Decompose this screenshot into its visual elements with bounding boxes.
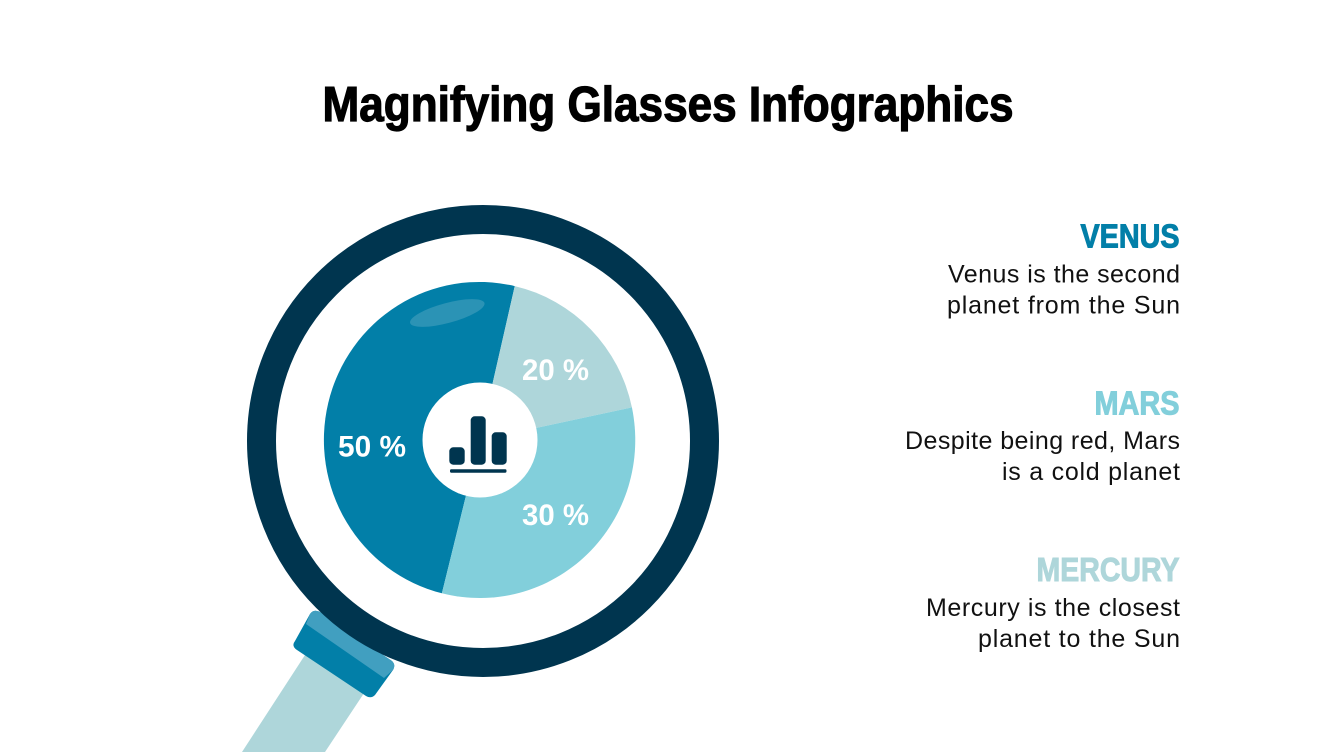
- description: Venus: Venus is the second: [948, 260, 1180, 288]
- description: Mars: Despite being red, Mars: [905, 427, 1180, 455]
- description: Mercury: Mercury is the closest: [926, 594, 1180, 622]
- text block: Venus: [947, 218, 1180, 320]
- label: 20 percent: 20 %: [522, 354, 589, 387]
- lens ring: [262, 220, 704, 662]
- slice: 20 percent: [480, 286, 632, 440]
- heading: Venus: VENUS: [1080, 218, 1180, 254]
- heading: Mercury: MERCURY: [1036, 551, 1180, 588]
- handle: [242, 635, 378, 752]
- magnifying glass: [242, 220, 704, 752]
- text block: Mercury: [926, 551, 1180, 653]
- label: 50 percent: 50 %: [338, 430, 406, 464]
- description: Venus: [947, 260, 1180, 320]
- icon: bar chart: [449, 416, 507, 473]
- slice: 30 percent: [442, 407, 635, 598]
- lens highlight: [408, 293, 487, 333]
- pie chart: [324, 282, 635, 598]
- heading: Mars: MARS: [1094, 384, 1180, 422]
- handle collar: [293, 611, 394, 697]
- label: 30 percent: 30 %: [522, 499, 589, 532]
- title: Magnifying Glasses Infographics: [322, 78, 1014, 132]
- description: Mars: [905, 427, 1180, 486]
- slice: 50 percent: [324, 282, 515, 593]
- text block: Mars: [905, 384, 1180, 486]
- description: Mars: is a cold planet: [1002, 458, 1180, 486]
- center circle: [422, 382, 538, 498]
- description: Mercury: [926, 594, 1180, 653]
- description: Venus: planet from the Sun: [947, 292, 1180, 320]
- description: Mercury: planet to the Sun: [978, 625, 1180, 653]
